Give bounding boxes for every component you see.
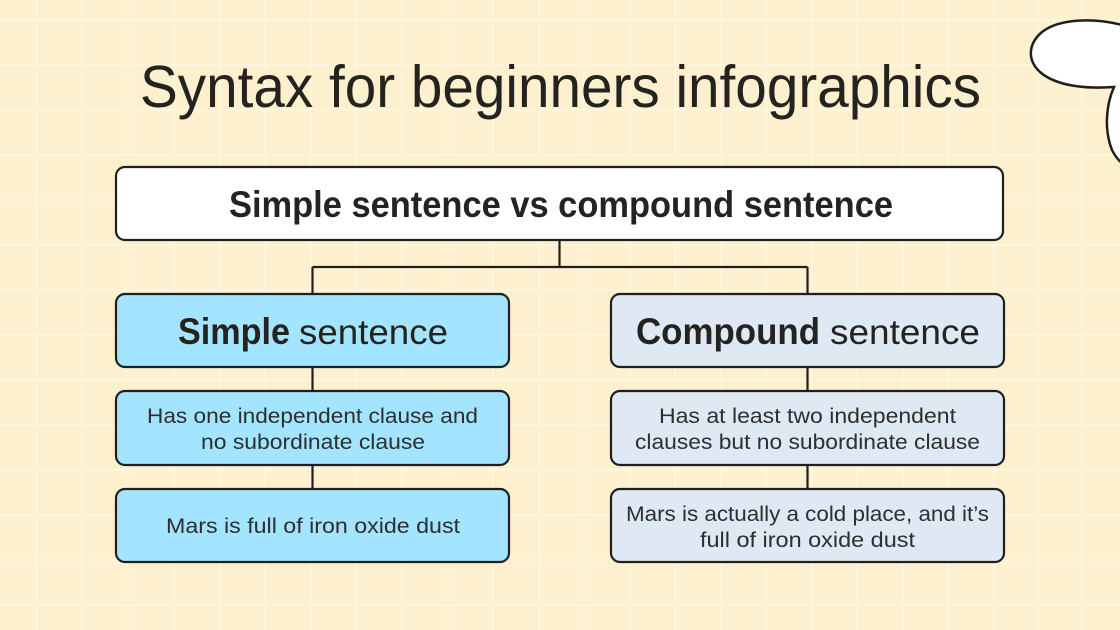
connectors <box>312 240 808 489</box>
heading: simple sentence: Simple <box>178 311 290 352</box>
text block: compound definition: Has at least two independent <box>659 404 956 428</box>
text block: simple definition <box>116 391 509 465</box>
text block: compound example: full of iron oxide dust <box>700 528 915 552</box>
icon: speech bubble <box>1031 20 1120 163</box>
text block: compound example <box>611 489 1004 562</box>
text block: simple definition: no subordinate clause <box>201 430 425 454</box>
panel: compound sentence column <box>611 294 1004 562</box>
text block: simple example <box>116 489 509 562</box>
heading: simple sentence <box>116 294 509 367</box>
heading: simple sentence: sentence <box>299 313 448 352</box>
title: Syntax for beginners infographics <box>140 54 981 120</box>
panel: main heading <box>116 167 1003 240</box>
panel: simple sentence column <box>116 294 509 562</box>
text block: simple example: Mars is full of iron oxide dust <box>166 514 460 538</box>
heading: compound sentence: Compound <box>636 311 820 352</box>
panel: main heading: Simple sentence vs compound sentence <box>229 184 893 225</box>
text block: simple definition: Has one independent clause and <box>147 404 478 428</box>
heading: compound sentence <box>611 294 1004 367</box>
text block: compound definition <box>611 391 1004 465</box>
text block: compound example: Mars is actually a cold place, and it’s <box>626 502 989 526</box>
heading: compound sentence: sentence <box>830 313 980 352</box>
text block: compound definition: clauses but no subordinate clause <box>635 430 980 454</box>
